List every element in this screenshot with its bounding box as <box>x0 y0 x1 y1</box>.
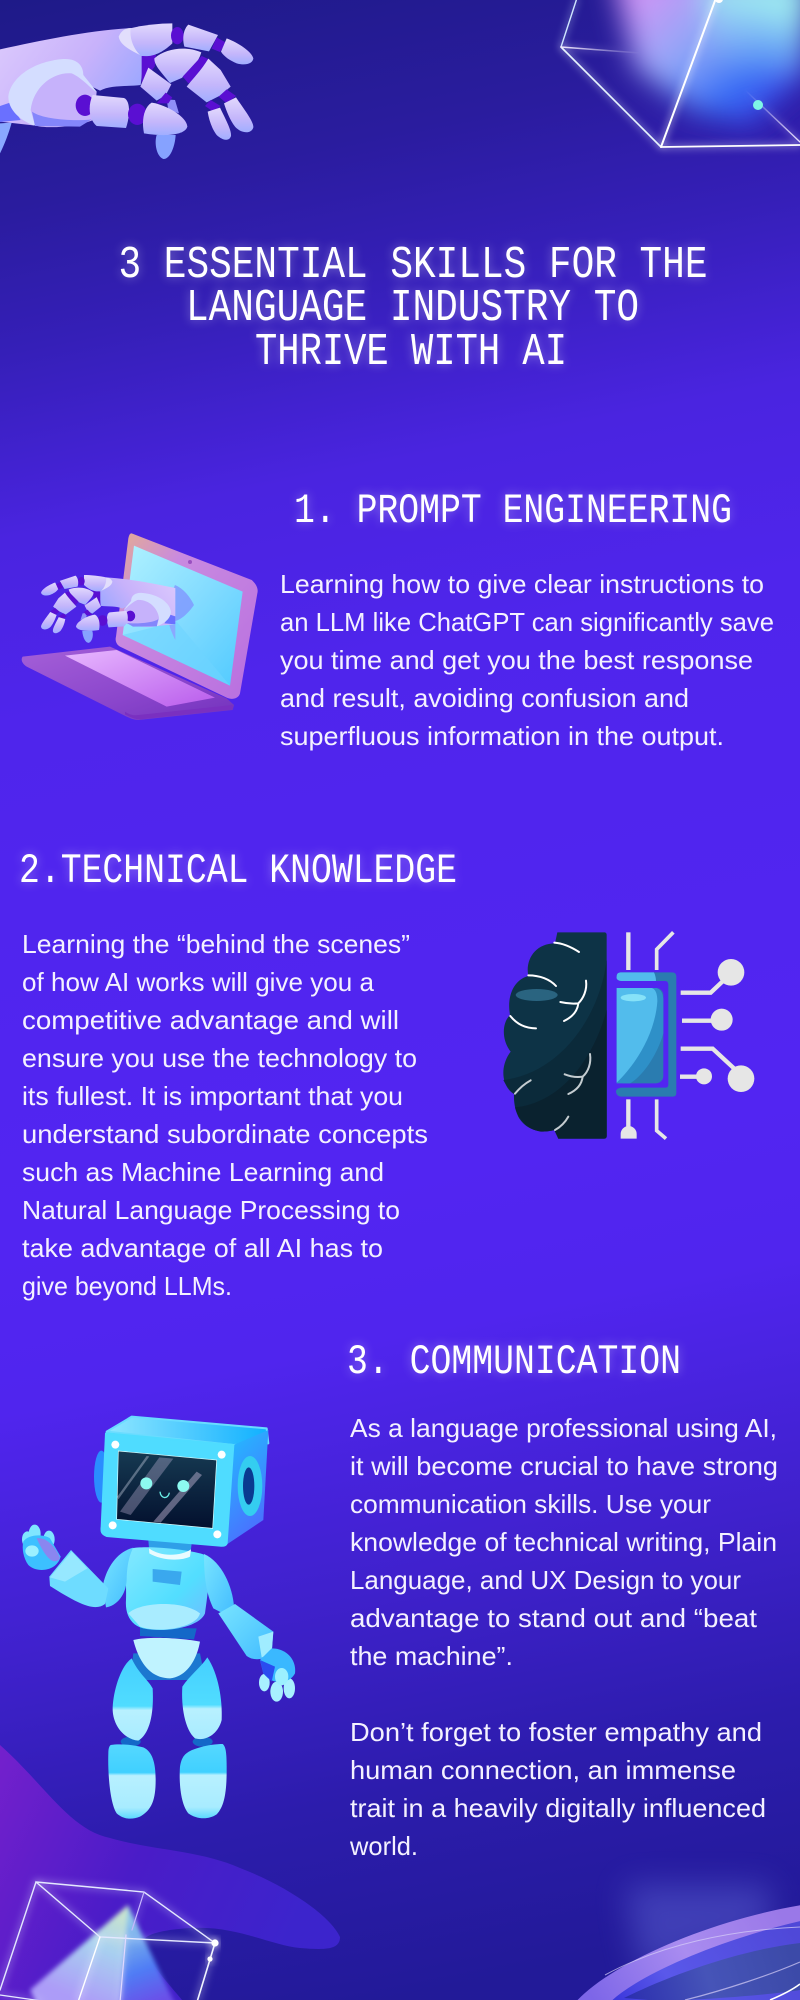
cube nodes <box>207 1939 219 1962</box>
title <box>118 240 708 378</box>
text: communication body: world. <box>349 1831 418 1861</box>
text: prompt engineering body: you time and get you the best response <box>280 645 753 675</box>
cube dot <box>753 100 763 110</box>
robot legs <box>108 1653 227 1819</box>
illustration: brain and circuit chip <box>503 932 754 1139</box>
text: technical knowledge body: Learning the “behind the scenes” <box>22 929 410 959</box>
text: technical knowledge body <box>22 929 428 1301</box>
text: communication body: trait in a heavily digitally influenced <box>350 1793 766 1823</box>
glowing cone <box>30 1905 178 2000</box>
text: prompt engineering body: an LLM like ChatGPT can significantly save <box>280 607 774 637</box>
panel: technical knowledge <box>19 847 754 1301</box>
illustration: glowing cube with light <box>561 0 800 147</box>
text: prompt engineering body <box>280 569 774 751</box>
panel: prompt engineering <box>22 487 774 751</box>
text: technical knowledge body: give beyond LLMs. <box>22 1271 232 1301</box>
illustration: bottom-right ring <box>546 1867 800 2000</box>
text: technical knowledge body: competitive advantage and will <box>22 1005 399 1035</box>
ring body <box>546 1867 800 2000</box>
text: communication body: Language, and UX Design to your <box>350 1565 741 1595</box>
text: communication body: Don’t forget to foster empathy and <box>350 1717 762 1747</box>
title: THRIVE WITH AI <box>255 327 567 378</box>
text: communication body <box>349 1413 778 1861</box>
text: technical knowledge body: understand subordinate concepts <box>22 1119 428 1149</box>
robot arms <box>22 1525 295 1702</box>
text: technical knowledge body: of how AI works will give you a <box>22 967 375 997</box>
heading: technical knowledge: 2.TECHNICAL KNOWLEDGE <box>19 847 457 895</box>
light beam <box>612 0 800 125</box>
text: communication body: knowledge of technical writing, Plain <box>350 1527 777 1557</box>
robot torso <box>126 1540 208 1678</box>
text: communication body: it will become crucial to have strong <box>350 1451 778 1481</box>
text: communication body: communication skills. Use your <box>350 1489 711 1519</box>
cube wireframe <box>0 1882 215 2000</box>
text: communication body: human connection, an immense <box>350 1755 736 1785</box>
illustration: laptop with robot hand <box>22 533 258 720</box>
decorative purple blob <box>0 1745 340 2000</box>
text: technical knowledge body: its fullest. It is important that you <box>22 1081 403 1111</box>
robot head <box>94 1417 268 1546</box>
title: LANGUAGE INDUSTRY TO <box>186 283 639 334</box>
illustration: robot hand <box>0 23 253 159</box>
text: communication body: advantage to stand out and “beat <box>350 1603 758 1633</box>
heading: communication: 3. COMMUNICATION <box>347 1338 681 1386</box>
text: communication body: As a language professional using AI, <box>350 1413 777 1443</box>
illustration: blue robot <box>22 1417 295 1819</box>
text: technical knowledge body: Natural Language Processing to <box>22 1195 400 1225</box>
cube outline <box>561 0 800 147</box>
text: prompt engineering body: and result, avoiding confusion and <box>280 683 689 713</box>
text: communication body: the machine”. <box>350 1641 513 1671</box>
ring glow <box>625 1885 770 1975</box>
text: technical knowledge body: take advantage of all AI has to <box>22 1233 383 1263</box>
text: prompt engineering body: superfluous information in the output. <box>280 721 724 751</box>
title: 3 ESSENTIAL SKILLS FOR THE <box>118 240 708 291</box>
panel: communication <box>22 1338 778 1861</box>
text: technical knowledge body: ensure you use the technology to <box>22 1043 417 1073</box>
illustration: bottom-left glass cube with cone <box>0 1882 219 2000</box>
text: technical knowledge body: such as Machine Learning and <box>22 1157 384 1187</box>
text: prompt engineering body: Learning how to give clear instructions to <box>280 569 764 599</box>
